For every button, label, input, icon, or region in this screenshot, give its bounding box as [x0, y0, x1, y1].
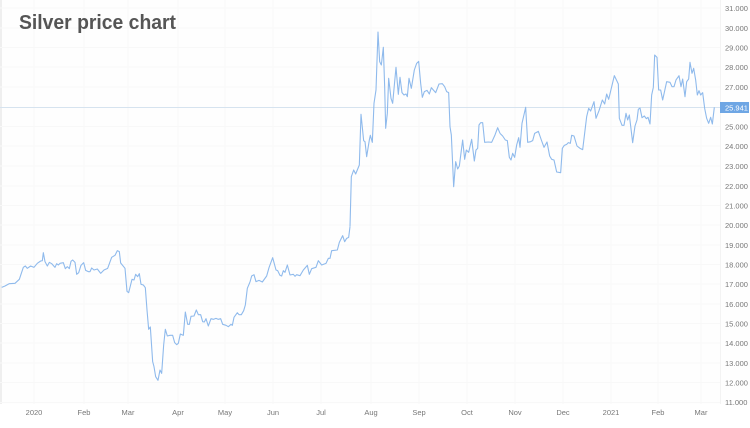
time axis labels [26, 408, 708, 417]
price axis labels: 14.000 [725, 339, 748, 348]
price axis labels: 25.000 [725, 122, 748, 132]
price axis labels: 12.000 [725, 378, 748, 388]
time axis labels: May [218, 408, 232, 417]
current price line [0, 107, 720, 108]
current price tag: 25.941 [725, 104, 748, 112]
price axis labels: 22.000 [725, 182, 748, 191]
time axis labels: 2021 [603, 408, 619, 417]
price axis labels: 11.000 [725, 398, 747, 407]
time axis labels: Mar [695, 408, 708, 417]
current price tag [720, 102, 749, 113]
time axis labels: 2020 [26, 408, 42, 417]
time axis labels: Apr [172, 408, 184, 417]
time axis labels: Mar [122, 408, 135, 417]
time axis labels: Jun [267, 408, 279, 417]
price axis labels: 16.000 [725, 300, 748, 309]
title: Silver price chart [19, 11, 176, 34]
price axis labels: 21.000 [725, 202, 748, 210]
time axis labels: Aug [364, 408, 378, 417]
price axis labels: 31.000 [725, 4, 748, 13]
price axis labels: 13.000 [725, 359, 748, 368]
price axis labels: 17.000 [725, 280, 748, 289]
time axis labels: Feb [652, 408, 664, 417]
price axis labels: 27.000 [725, 83, 748, 92]
time axis labels: Dec [556, 408, 570, 417]
price axis labels: 23.000 [725, 162, 748, 171]
price axis labels: 29.000 [725, 44, 748, 52]
price line [2, 32, 714, 380]
price axis labels: 19.000 [725, 241, 748, 250]
price axis labels: 28.000 [725, 63, 748, 72]
price axis labels: 30.000 [725, 24, 748, 33]
price axis labels: 24.000 [725, 142, 748, 151]
price axis labels: 18.000 [725, 260, 748, 270]
price axis labels: 20.000 [725, 221, 748, 230]
price axis labels: 15.000 [725, 320, 748, 328]
time axis labels: Jul [316, 408, 326, 417]
price axis labels [725, 4, 748, 407]
time axis labels: Oct [461, 408, 474, 417]
time axis labels: Sep [412, 408, 426, 417]
time axis labels: Nov [508, 408, 522, 417]
time axis labels: Feb [78, 408, 90, 417]
